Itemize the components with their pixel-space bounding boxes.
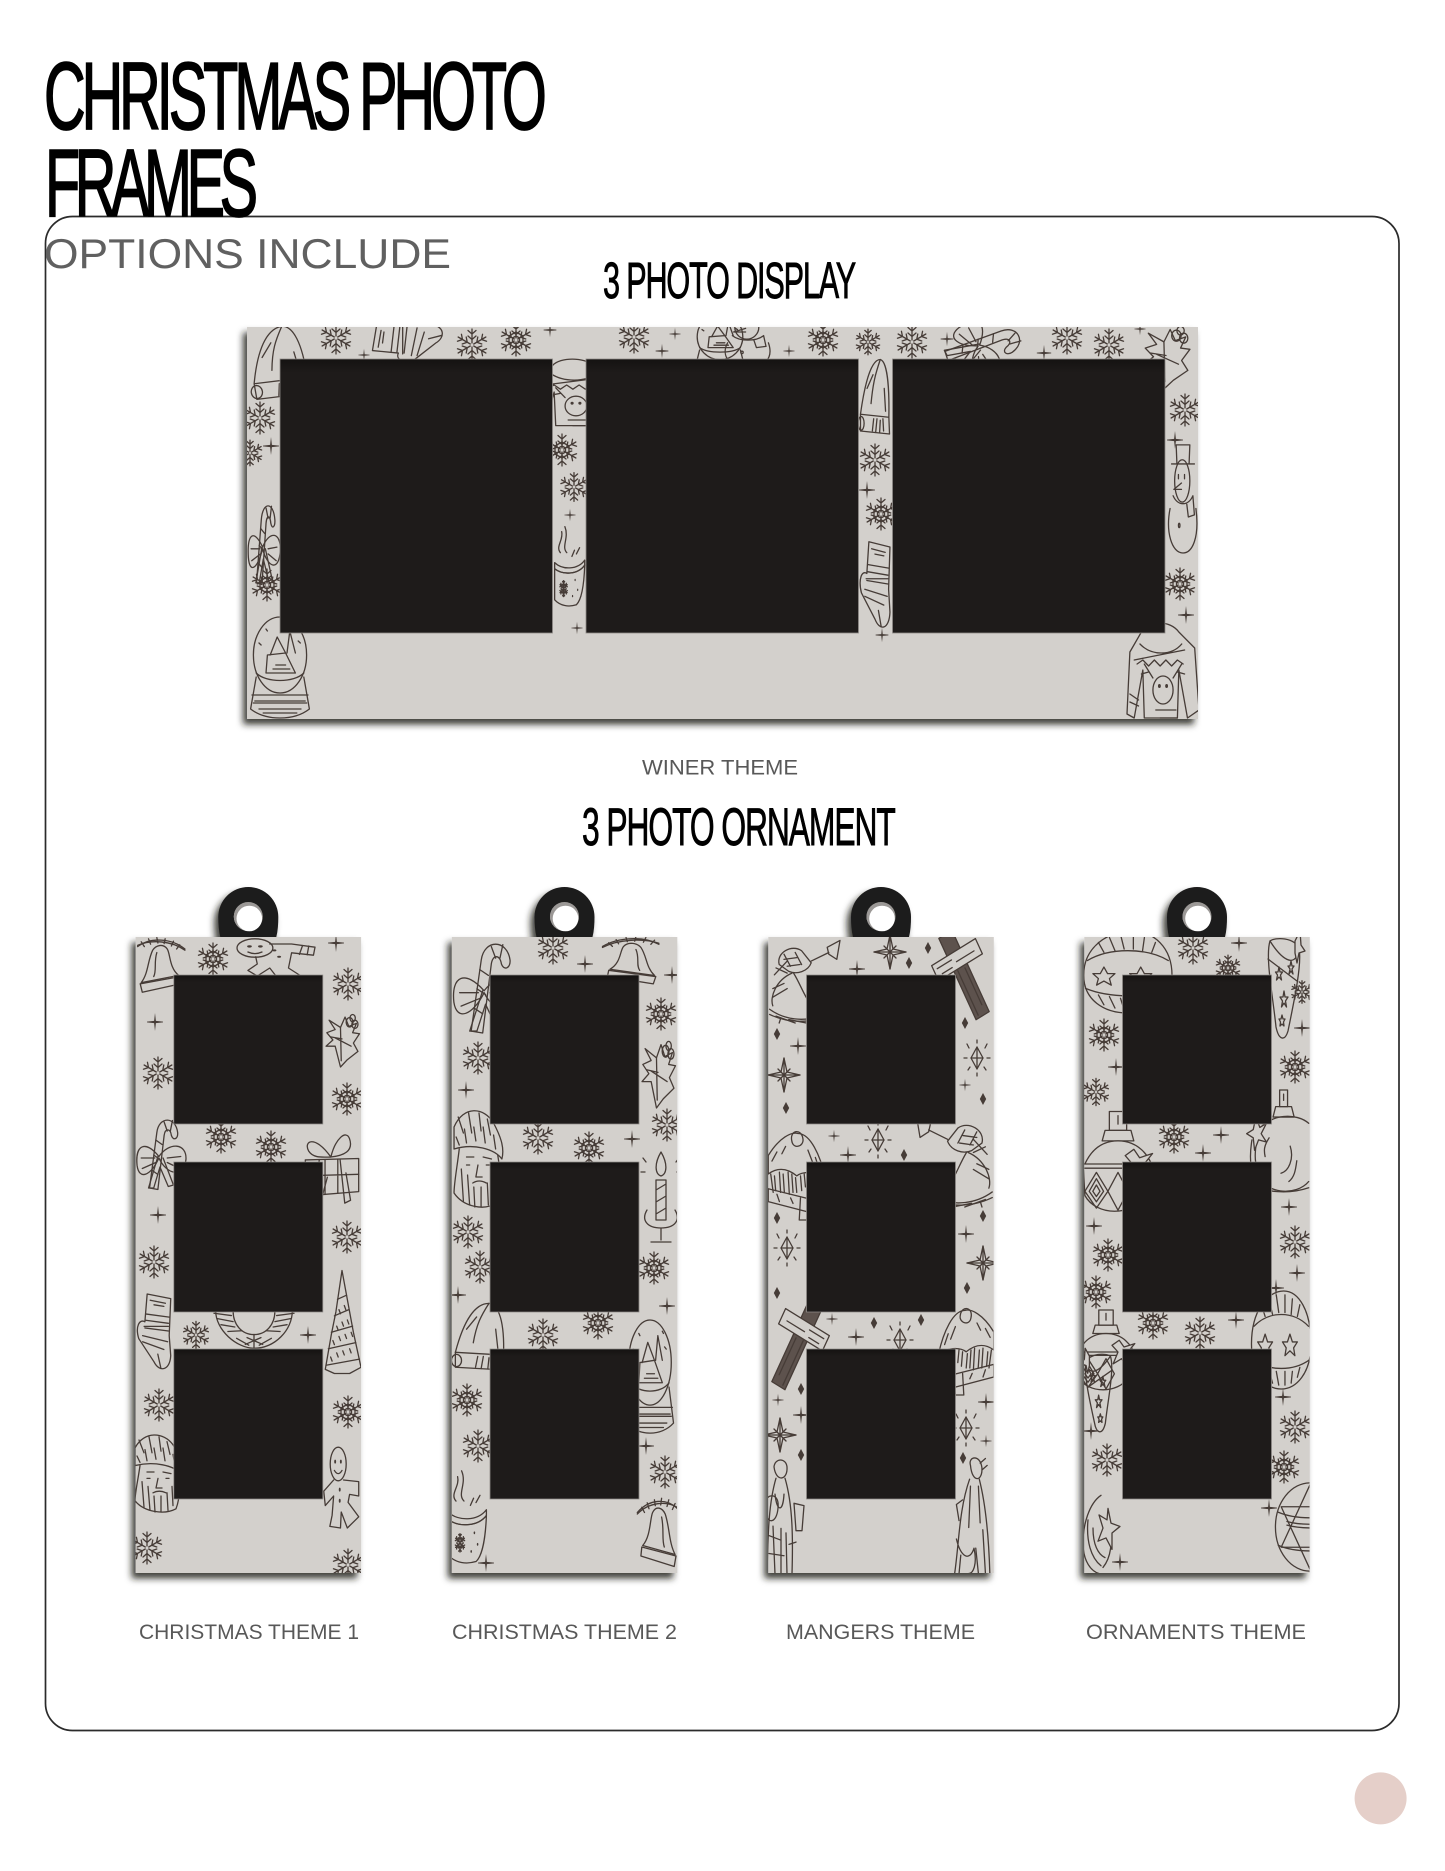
title: FRAMES bbox=[45, 129, 258, 237]
caption: mangers theme: MANGERS THEME bbox=[786, 1621, 975, 1644]
title bbox=[44, 42, 547, 237]
caption: christmas theme 2: CHRISTMAS THEME 2 bbox=[452, 1621, 677, 1644]
photo openings bbox=[280, 359, 1165, 633]
winter doodles bbox=[237, 304, 1201, 718]
photo openings bbox=[806, 975, 956, 1499]
ornament: ornaments theme bbox=[1074, 887, 1312, 1584]
doodles: ornaments bbox=[1084, 937, 1310, 1573]
panel: options frame bbox=[46, 216, 1399, 1730]
heading: 3 photo display: 3 PHOTO DISPLAY bbox=[603, 252, 856, 309]
doodles: mangers bbox=[768, 937, 994, 1573]
subtitle: OPTIONS INCLUDE bbox=[44, 230, 451, 277]
photo openings bbox=[174, 975, 323, 1499]
photo openings bbox=[1122, 975, 1272, 1499]
doodles: christmas 1 bbox=[131, 934, 364, 1581]
ornament: christmas theme 2 bbox=[449, 887, 683, 1573]
caption: winter theme: WINER THEME bbox=[642, 756, 798, 780]
3 photo display frame bbox=[237, 304, 1201, 719]
title: CHRISTMAS PHOTO bbox=[44, 42, 547, 150]
caption: christmas theme 1: CHRISTMAS THEME 1 bbox=[139, 1621, 359, 1644]
heading: 3 photo ornament: 3 PHOTO ORNAMENT bbox=[582, 798, 896, 857]
page marker circle bbox=[1355, 1772, 1407, 1824]
ornament: christmas theme 1 bbox=[131, 887, 364, 1581]
candle bbox=[641, 1152, 681, 1242]
ornament: mangers theme bbox=[756, 887, 1005, 1574]
photo openings bbox=[490, 975, 639, 1499]
caption: ornaments theme: ORNAMENTS THEME bbox=[1086, 1621, 1306, 1644]
doodles: christmas 2 bbox=[449, 932, 683, 1572]
